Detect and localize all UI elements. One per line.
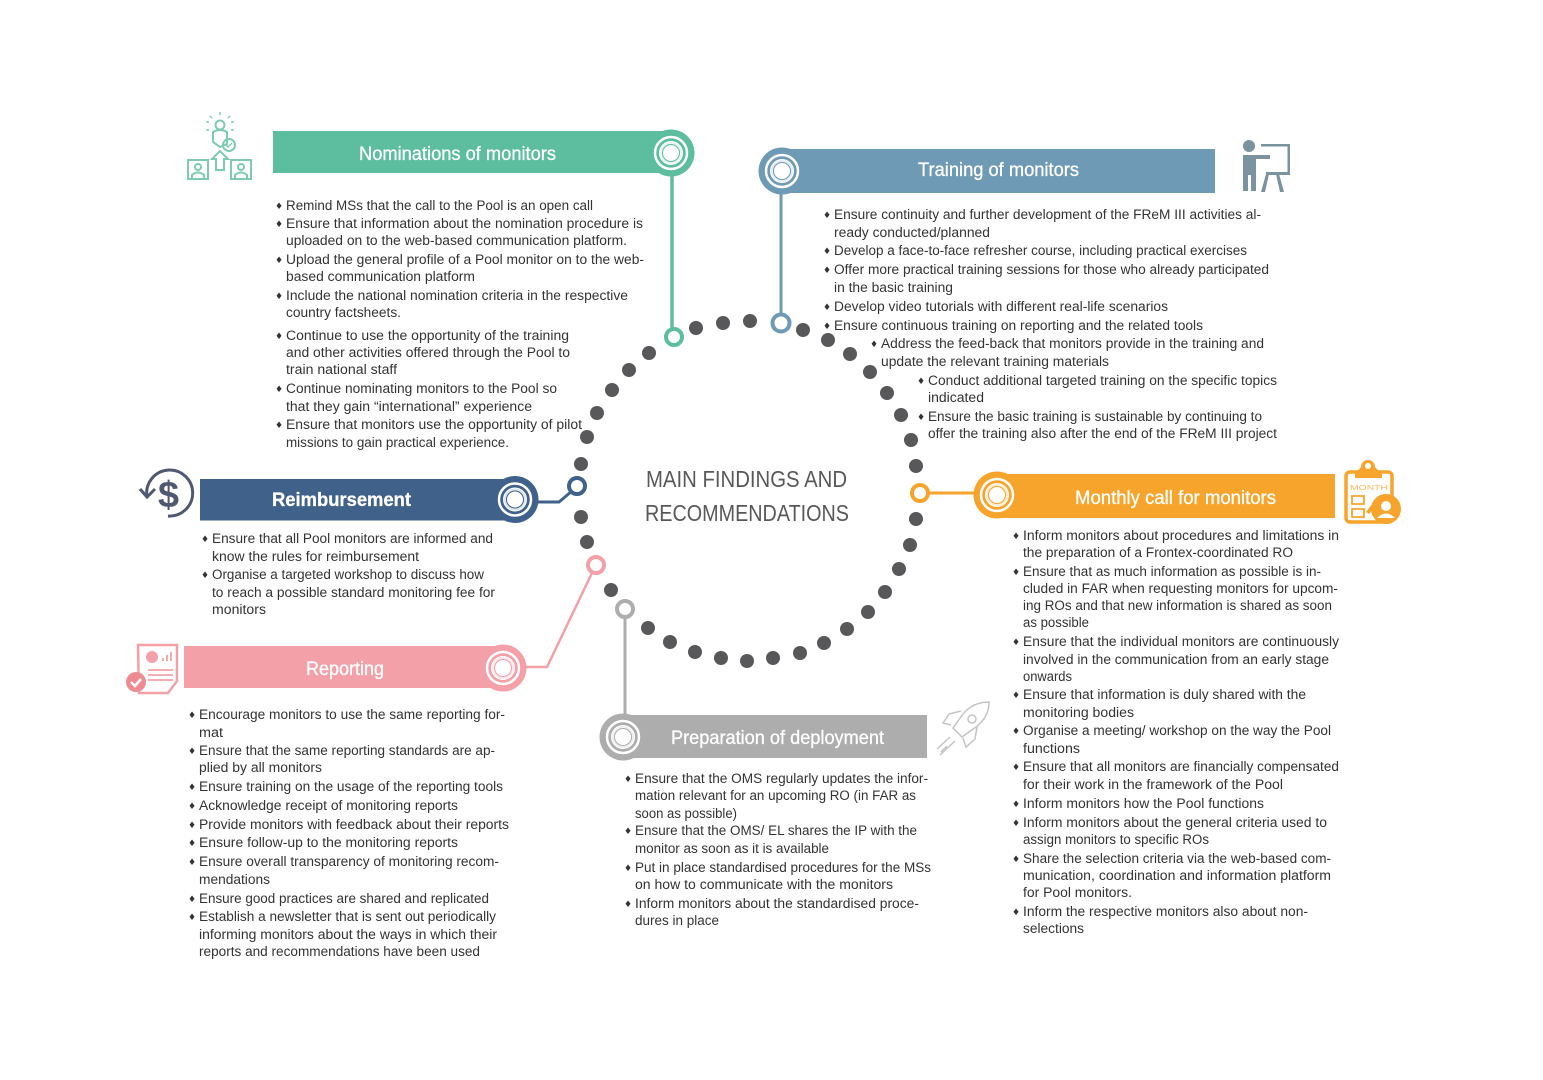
text: nominations recommendations: ♦ <box>275 202 283 212</box>
header: training: Training of monitors <box>918 160 1079 181</box>
text: monthly call recommendations: onwards <box>1023 669 1072 684</box>
text: training recommendations: indicated <box>928 390 984 405</box>
text: training recommendations: Ensure the basic training is sustainable by continuing to <box>928 409 1262 424</box>
text: nominations recommendations: ♦ <box>275 332 283 342</box>
text: monthly call recommendations <box>1012 528 1339 936</box>
text: monthly call recommendations: ♦ <box>1012 727 1020 737</box>
text: reporting recommendations: Acknowledge receipt of monitoring reports <box>199 798 458 813</box>
text: reporting recommendations: mat <box>199 725 223 740</box>
text: monthly call recommendations: ♦ <box>1012 532 1020 542</box>
header: training <box>758 148 1215 194</box>
icon: nominated person <box>188 112 251 179</box>
text: monthly call recommendations: Organise a meeting/ workshop on the way the Pool <box>1023 723 1331 738</box>
header: reimbursement <box>200 476 538 523</box>
text: nominations recommendations: Include the national nomination criteria in the respective <box>286 288 628 303</box>
text: training recommendations <box>823 207 1277 441</box>
icon: trainer at board <box>1243 140 1290 192</box>
text: preparation recommendations <box>624 771 931 928</box>
text: nominations recommendations: Ensure that information about the nomination procedure is <box>286 216 643 231</box>
text: preparation recommendations: dures in place <box>635 913 719 928</box>
text: monthly call recommendations: cluded in FAR when requesting monitors for upcom- <box>1023 581 1338 596</box>
header: reporting: Reporting <box>306 659 384 680</box>
text: reporting recommendations: ♦ <box>188 895 196 905</box>
text: training recommendations: Conduct additional targeted training on the specific topics <box>928 373 1277 388</box>
text: training recommendations: ♦ <box>823 303 831 313</box>
panel: reimbursement <box>140 470 585 617</box>
header: reimbursement: Reimbursement <box>272 490 412 511</box>
text: monthly call recommendations: munication, coordination and information platform <box>1023 868 1331 883</box>
panel: monthly call for monitors <box>912 460 1401 936</box>
text: reporting recommendations: ♦ <box>188 802 196 812</box>
text: reimbursement recommendations <box>201 531 496 617</box>
text: training recommendations: ♦ <box>917 413 925 423</box>
header: reporting <box>184 644 526 692</box>
text: training recommendations: Address the feed-back that monitors provide in the training and <box>881 336 1264 351</box>
text: monthly call recommendations: ♦ <box>1012 819 1020 829</box>
connector: training <box>772 190 790 332</box>
text: monthly call recommendations: ♦ <box>1012 638 1020 648</box>
text: reporting recommendations: ♦ <box>188 747 196 757</box>
text: reporting recommendations: informing monitors about the ways in which their <box>199 927 498 942</box>
text: monthly call recommendations: Inform monitors about the general criteria used to <box>1023 815 1327 830</box>
text: monthly call recommendations: the preparation of a Frontex-coordinated RO <box>1023 545 1293 560</box>
text: nominations recommendations: Ensure that monitors use the opportunity of pilot <box>286 417 582 432</box>
text: nominations recommendations: ♦ <box>275 385 283 395</box>
text: training recommendations: ♦ <box>823 247 831 257</box>
text: reporting recommendations: ♦ <box>188 821 196 831</box>
text: nominations recommendations: Remind MSs that the call to the Pool is an open call <box>286 198 593 213</box>
text: monthly call recommendations: Ensure that all monitors are financially compensated <box>1023 759 1339 774</box>
text: preparation recommendations: Inform monitors about the standardised proce- <box>635 896 919 911</box>
header: monthly <box>974 472 1335 518</box>
text: monthly call recommendations: as possible <box>1023 615 1089 630</box>
text: reporting recommendations: Establish a newsletter that is sent out periodically <box>199 909 496 924</box>
panel: preparation of deployment <box>600 601 989 928</box>
panel: training of monitors <box>758 140 1290 441</box>
text: training recommendations: offer the training also after the end of the FReM III project <box>928 426 1277 441</box>
connector: nominations <box>666 170 682 345</box>
header: nominations <box>273 130 694 176</box>
text: nominations recommendations: missions to gain practical experience. <box>286 435 509 450</box>
text: reporting recommendations: ♦ <box>188 711 196 721</box>
text: nominations recommendations: train national staff <box>286 362 397 377</box>
text: reimbursement recommendations: to reach a possible standard monitoring fee for <box>212 585 496 600</box>
text: monthly call recommendations: ♦ <box>1012 908 1020 918</box>
text: reporting recommendations: plied by all monitors <box>199 760 322 775</box>
text: reporting recommendations: Ensure overall transparency of monitoring recom- <box>199 854 499 869</box>
panel: reporting <box>126 557 604 959</box>
header: nominations: Nominations of monitors <box>359 144 556 165</box>
text: monthly call recommendations: ♦ <box>1012 568 1020 578</box>
text: reporting recommendations: ♦ <box>188 913 196 923</box>
text: monthly call recommendations: ♦ <box>1012 691 1020 701</box>
text: training recommendations: ♦ <box>823 211 831 221</box>
text: monthly call recommendations: assign monitors to specific ROs <box>1023 832 1209 847</box>
connector: reimbursement <box>535 478 585 502</box>
text: preparation recommendations: ♦ <box>624 900 632 910</box>
central title <box>645 466 849 526</box>
icon: monthly clipboard: MONTH <box>1350 483 1388 492</box>
text: training recommendations: ♦ <box>917 377 925 387</box>
text: nominations recommendations: Continue nominating monitors to the Pool so <box>286 381 557 396</box>
text: preparation recommendations: mation relevant for an upcoming RO (in FAR as <box>635 788 916 803</box>
header: monthly: Monthly call for monitors <box>1075 488 1276 509</box>
icon: report document <box>126 645 177 693</box>
central title: RECOMMENDATIONS <box>645 500 849 526</box>
text: nominations recommendations <box>275 198 644 450</box>
text: monthly call recommendations: monitoring bodies <box>1023 705 1134 720</box>
text: monthly call recommendations: functions <box>1023 741 1080 756</box>
text: reporting recommendations: ♦ <box>188 839 196 849</box>
text: nominations recommendations: Continue to use the opportunity of the training <box>286 328 569 343</box>
header: preparation <box>600 714 927 760</box>
text: reimbursement recommendations: know the rules for reimbursement <box>212 549 419 564</box>
text: reporting recommendations: ♦ <box>188 858 196 868</box>
text: nominations recommendations: ♦ <box>275 256 283 266</box>
text: reporting recommendations <box>188 707 509 959</box>
connector: preparation <box>617 601 633 716</box>
connector: monthly <box>912 485 980 501</box>
text: monthly call recommendations: ♦ <box>1012 855 1020 865</box>
text: training recommendations: ♦ <box>823 322 831 332</box>
icon: dollar refund <box>140 470 193 516</box>
text: training recommendations: Develop video tutorials with different real-life scenarios <box>834 299 1168 314</box>
dotted circle <box>574 314 923 668</box>
text: preparation recommendations: ♦ <box>624 827 632 837</box>
text: preparation recommendations: Ensure that the OMS/ EL shares the IP with the <box>635 823 917 838</box>
text: reporting recommendations: ♦ <box>188 783 196 793</box>
text: monthly call recommendations: ing ROs and that new information is shared as soon <box>1023 598 1332 613</box>
text: training recommendations: ready conducted/planned <box>834 225 990 240</box>
text: preparation recommendations: Ensure that the OMS regularly updates the infor- <box>635 771 928 786</box>
text: training recommendations: Offer more practical training sessions for those who already participated <box>834 262 1269 277</box>
text: monthly call recommendations: Ensure that information is duly shared with the <box>1023 687 1306 702</box>
text: training recommendations: ♦ <box>870 340 878 350</box>
text: monthly call recommendations: Inform the respective monitors also about non- <box>1023 904 1308 919</box>
text: monthly call recommendations: selections <box>1023 921 1084 936</box>
text: training recommendations: in the basic training <box>834 280 953 295</box>
text: nominations recommendations: country factsheets. <box>286 305 401 320</box>
text: nominations recommendations: ♦ <box>275 421 283 431</box>
text: reimbursement recommendations: ♦ <box>201 571 209 581</box>
text: reporting recommendations: Ensure follow-up to the monitoring reports <box>199 835 458 850</box>
text: reimbursement recommendations: Ensure that all Pool monitors are informed and <box>212 531 493 546</box>
text: nominations recommendations: ♦ <box>275 220 283 230</box>
text: nominations recommendations: based communication platform <box>286 269 475 284</box>
text: preparation recommendations: soon as possible) <box>635 806 737 821</box>
text: reporting recommendations: mendations <box>199 872 270 887</box>
text: preparation recommendations: monitor as soon as it is available <box>635 841 829 856</box>
text: reporting recommendations: Ensure good practices are shared and replicated <box>199 891 489 906</box>
text: reporting recommendations: Ensure that the same reporting standards are ap- <box>199 743 495 758</box>
text: monthly call recommendations: ♦ <box>1012 763 1020 773</box>
text: reporting recommendations: Ensure training on the usage of the reporting tools <box>199 779 503 794</box>
text: monthly call recommendations: for their work in the framework of the Pool <box>1023 777 1283 792</box>
text: monthly call recommendations: ♦ <box>1012 800 1020 810</box>
text: reporting recommendations: reports and recommendations have been used <box>199 944 480 959</box>
text: nominations recommendations: that they gain “international” experience <box>286 399 532 414</box>
text: nominations recommendations: ♦ <box>275 292 283 302</box>
text: training recommendations: Ensure continuity and further development of the FReM III activities al- <box>834 207 1261 222</box>
text: nominations recommendations: and other activities offered through the Pool to <box>286 345 570 360</box>
text: reimbursement recommendations: Organise a targeted workshop to discuss how <box>212 567 484 582</box>
connector: reporting <box>522 557 604 667</box>
text: nominations recommendations: Upload the general profile of a Pool monitor on to the web- <box>286 252 644 267</box>
text: training recommendations: update the relevant training materials <box>881 354 1109 369</box>
central title: MAIN FINDINGS AND <box>646 466 847 492</box>
text: reimbursement recommendations: monitors <box>212 602 266 617</box>
text: monthly call recommendations: Ensure that as much information as possible is in- <box>1023 564 1321 579</box>
icon: dollar refund: $ <box>158 474 179 515</box>
header: preparation: Preparation of deployment <box>671 728 885 749</box>
text: monthly call recommendations: Inform monitors about procedures and limitations in <box>1023 528 1339 543</box>
text: preparation recommendations: Put in place standardised procedures for the MSs <box>635 860 931 875</box>
panel: nominations of monitors <box>188 112 694 450</box>
text: training recommendations: Develop a face-to-face refresher course, including practical exercises <box>834 243 1247 258</box>
text: reporting recommendations: Encourage monitors to use the same reporting for- <box>199 707 505 722</box>
text: monthly call recommendations: Share the selection criteria via the web-based com- <box>1023 851 1331 866</box>
text: monthly call recommendations: for Pool monitors. <box>1023 885 1132 900</box>
text: training recommendations: Ensure continuous training on reporting and the related tools <box>834 318 1203 333</box>
icon: rocket <box>937 702 989 755</box>
text: preparation recommendations: on how to communicate with the monitors <box>635 877 893 892</box>
icon: monthly clipboard <box>1346 460 1401 524</box>
text: monthly call recommendations: Ensure that the individual monitors are continuously <box>1023 634 1339 649</box>
text: nominations recommendations: uploaded on to the web-based communication platform. <box>286 233 627 248</box>
text: reporting recommendations: Provide monitors with feedback about their reports <box>199 817 509 832</box>
text: monthly call recommendations: Inform monitors how the Pool functions <box>1023 796 1264 811</box>
text: monthly call recommendations: involved in the communication from an early stage <box>1023 652 1329 667</box>
text: reimbursement recommendations: ♦ <box>201 535 209 545</box>
text: preparation recommendations: ♦ <box>624 775 632 785</box>
text: preparation recommendations: ♦ <box>624 864 632 874</box>
text: training recommendations: ♦ <box>823 266 831 276</box>
